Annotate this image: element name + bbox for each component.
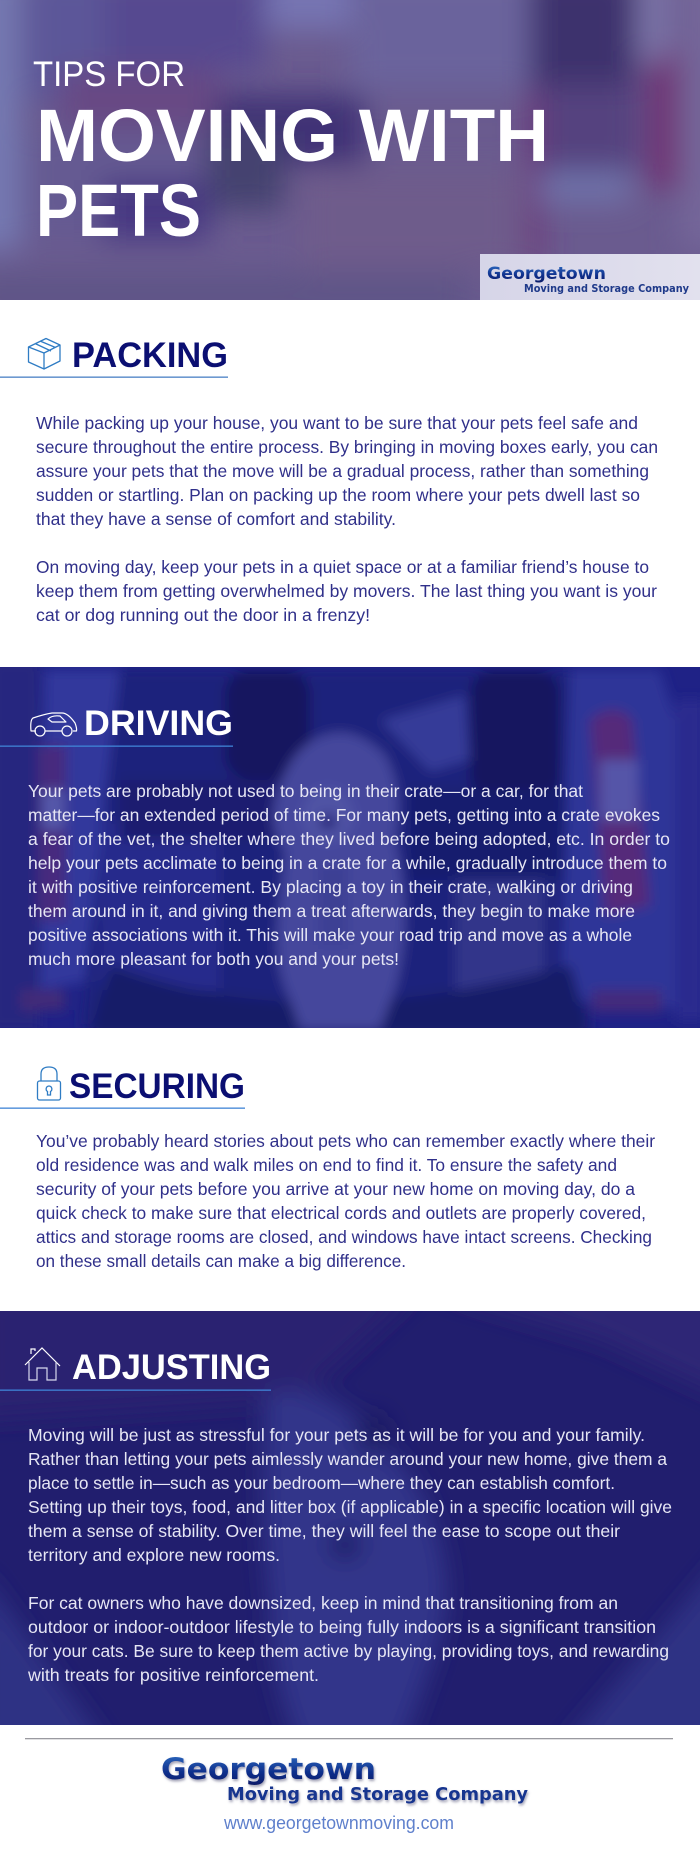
icon: car (31, 713, 77, 736)
adjusting body text: place to settle in—such as your bedroom—where they can establish comfort. (28, 1473, 615, 1493)
driving body text: help your pets acclimate to being in a crate for a while, gradually introduce them to (28, 853, 667, 873)
hero logo badge: Georgetown (487, 264, 606, 283)
securing heading: SECURING (69, 1067, 245, 1106)
securing body text: on these small details can make a big difference. (36, 1251, 406, 1271)
securing body text: old residence was and walk miles on end to find it. To ensure the safety and (36, 1155, 617, 1175)
driving body text: Your pets are probably not used to being in their crate—or a car, for that (28, 781, 583, 801)
footer logo: Georgetown (161, 1752, 376, 1786)
driving body text: positive associations with it. This will make your road trip and move as a whole (28, 925, 632, 945)
adjusting underline (0, 1390, 271, 1391)
packing heading: PACKING (72, 336, 228, 375)
footer divider (25, 1738, 673, 1739)
panel: footer (25, 1738, 673, 1833)
adjusting body text: Setting up their toys, food, and litter box (if applicable) in a specific location will give (28, 1497, 672, 1517)
driving body text: them around in it, and giving them a treat afterwards, they begin to make more (28, 901, 635, 921)
panel: hero header (0, 0, 700, 322)
adjusting body text: them a sense of stability. Over time, they will feel the ease to scope out their (28, 1521, 620, 1541)
panel: packing (0, 336, 658, 625)
adjusting body text: For cat owners who have downsized, keep in mind that transitioning from an (28, 1593, 618, 1613)
adjusting body text: territory and explore new rooms. (28, 1545, 280, 1565)
packing body text: assure your pets that the move will be a gradual process, rather than something (36, 461, 649, 481)
adjusting body text: Moving will be just as stressful for your pets as it will be for you and your family. (28, 1425, 645, 1445)
driving body text (28, 781, 670, 969)
adjusting body text: with treats for positive reinforcement. (27, 1665, 319, 1685)
driving photo background (0, 660, 700, 1035)
securing body text: attics and storage rooms are closed, and windows have intact screens. Checking (36, 1227, 652, 1247)
hero main title (36, 94, 549, 252)
adjusting photo background (0, 1290, 700, 1750)
packing underline (0, 376, 228, 378)
hero small title: TIPS FOR (33, 55, 185, 94)
panel: securing (0, 1067, 655, 1271)
packing body text: secure throughout the entire process. By bringing in moving boxes early, you can (36, 437, 658, 457)
driving heading: DRIVING (84, 704, 233, 743)
packing body text: keep them from getting overwhelmed by movers. The last thing you want is your (36, 581, 657, 601)
driving body text: matter—for an extended period of time. For many pets, getting into a crate evokes (28, 805, 660, 825)
adjusting heading: ADJUSTING (72, 1348, 271, 1387)
hero main title: MOVING WITH (36, 94, 549, 177)
hero logo badge (480, 254, 700, 300)
adjusting body text: outdoor or indoor-outdoor lifestyle to being fully indoors is a significant transition (28, 1617, 656, 1637)
driving body text: much more pleasant for both you and your pets! (28, 949, 399, 969)
footer logo (161, 1752, 528, 1805)
driving underline (0, 746, 233, 747)
hero blurred photo background (0, 0, 700, 322)
panel: adjusting (0, 1290, 700, 1750)
icon: house (25, 1348, 60, 1380)
securing body text: quick check to make sure that electrical cords and outlets are properly covered, (36, 1203, 646, 1223)
icon: box (28, 338, 60, 369)
securing body text: You’ve probably heard stories about pets who can remember exactly where their (36, 1131, 655, 1151)
driving body text: a fear of the vet, the shelter where they lived before being adopted, etc. In order to (28, 829, 670, 849)
driving body text: it with positive reinforcement. By placing a toy in their crate, walking or driving (28, 877, 633, 897)
packing body text: On moving day, keep your pets in a quiet space or at a familiar friend’s house to (36, 557, 649, 577)
footer website: www.georgetownmoving.com (223, 1813, 454, 1833)
adjusting body text (27, 1425, 672, 1685)
securing underline (0, 1108, 245, 1109)
adjusting body text: Rather than letting your pets aimlessly wander around your new home, give them a (28, 1449, 667, 1469)
packing body text: cat or dog running out the door in a frenzy! (36, 605, 370, 625)
securing body text (36, 1131, 655, 1271)
packing body text: that they have a sense of comfort and stability. (36, 509, 396, 529)
hero main title: PETS (36, 169, 201, 252)
adjusting body text: for your cats. Be sure to keep them active by playing, providing toys, and rewarding (28, 1641, 669, 1661)
packing body text: While packing up your house, you want to be sure that your pets feel safe and (36, 413, 638, 433)
cat silhouette decoration (263, 1391, 447, 1750)
packing body text: sudden or startling. Plan on packing up the room where your pets dwell last so (36, 485, 640, 505)
packing body text (36, 413, 658, 625)
hero logo badge: Moving and Storage Company (524, 283, 689, 295)
icon: padlock (38, 1067, 60, 1100)
panel: driving (0, 660, 700, 1035)
dog silhouette decoration (273, 732, 405, 1030)
securing body text: security of your pets before you arrive at your new home on moving day, do a (36, 1179, 635, 1199)
footer logo: Moving and Storage Company (227, 1784, 528, 1805)
